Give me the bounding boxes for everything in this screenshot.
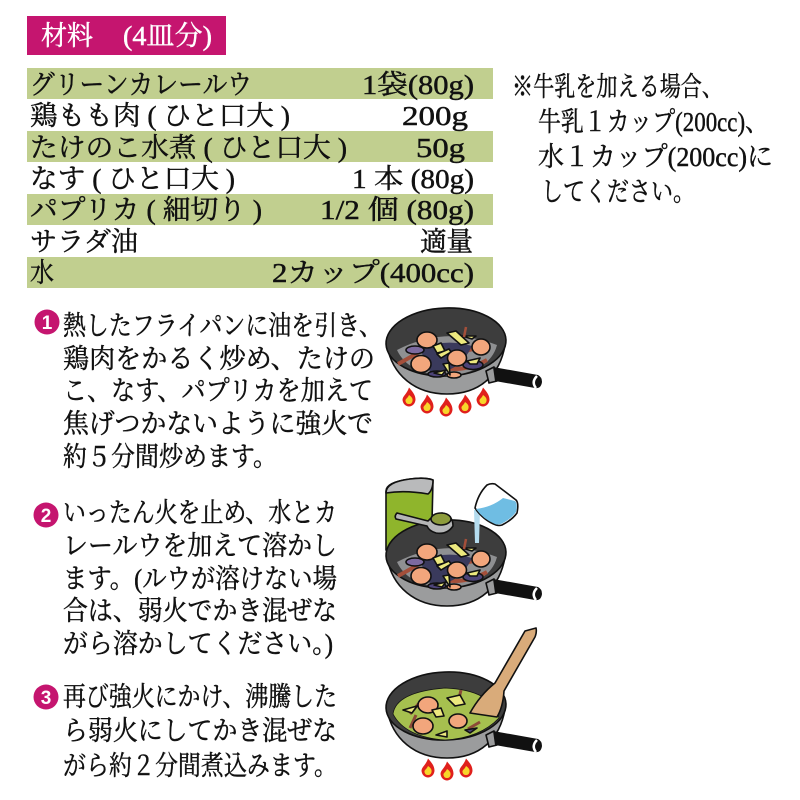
illustration: roux package, spoon, water cup and pan xyxy=(385,478,542,606)
step 3 badge xyxy=(34,684,58,710)
step 2 text: ます。(ルウが溶けない場 xyxy=(63,564,337,594)
ingredients table: 1 本 (80g) xyxy=(352,164,474,194)
ingredients table: 2カップ(400cc) xyxy=(272,258,474,288)
ingredients table: 適量 xyxy=(420,227,473,257)
ingredients table: グリーンカレールウ xyxy=(30,70,252,100)
step 1 badge: 1 xyxy=(42,313,53,334)
step 1 text: 熱したフライパンに油を引き、 xyxy=(63,311,382,341)
ingredients table: 水 xyxy=(30,258,54,288)
illustration: green curry simmering with spatula xyxy=(385,628,542,780)
step 2 text xyxy=(63,498,337,659)
step 1 text: 鶏肉をかるく炒め、たけの xyxy=(63,344,375,374)
ingredients table xyxy=(27,68,493,288)
ingredients table: 200g xyxy=(402,101,468,131)
ingredients table: 50g xyxy=(416,133,465,163)
heading: ingredients xyxy=(27,16,226,55)
step 2 text: 合は、弱火でかき混ぜな xyxy=(63,596,337,626)
step 1 badge xyxy=(34,310,60,334)
step 3 text: 再び強火にかけ、沸騰した xyxy=(63,682,337,712)
step 1 text: 焦げつかないように強火で xyxy=(63,409,373,439)
step 2 text: いったん火を止め、水とカ xyxy=(63,498,337,528)
step 2 text: レールウを加えて溶かし xyxy=(63,531,337,561)
step 1 text: こ、なす、パプリカを加えて xyxy=(63,376,373,406)
step 1 text: 約５分間炒めます。 xyxy=(63,442,277,472)
note: milk substitution: してください。 xyxy=(541,177,695,207)
ingredients table: なす ( ひと口大 ) xyxy=(30,164,235,194)
ingredients table: パプリカ ( 細切り ) xyxy=(30,195,262,225)
ingredients table: サラダ油 xyxy=(30,227,138,257)
illustration: frying pan over high heat xyxy=(385,306,542,416)
ingredients table: 1/2 個 (80g) xyxy=(320,195,474,225)
note: milk substitution xyxy=(512,72,773,207)
step 3 text xyxy=(63,682,337,781)
step 2 badge xyxy=(34,502,58,528)
heading: ingredients: (4皿分) xyxy=(123,21,212,51)
step 2 badge: 2 xyxy=(41,506,51,527)
step 3 badge: 3 xyxy=(41,688,51,709)
note: milk substitution: 水１カップ(200cc)に xyxy=(538,142,773,172)
note: milk substitution: ※牛乳を加える場合、 xyxy=(512,72,723,102)
step 2 text: がら溶かしてください。) xyxy=(63,629,333,659)
step 3 text: ら弱火にしてかき混ぜな xyxy=(63,716,337,746)
ingredients table: 鶏もも肉 ( ひと口大 ) xyxy=(30,101,290,131)
ingredients table: 1袋(80g) xyxy=(362,70,474,100)
heading: ingredients: 材料 xyxy=(41,21,93,51)
step 1 text xyxy=(63,311,382,472)
step 3 text: がら約２分間煮込みます。 xyxy=(63,751,337,781)
ingredients table: たけのこ水煮 ( ひと口大 ) xyxy=(30,133,347,163)
